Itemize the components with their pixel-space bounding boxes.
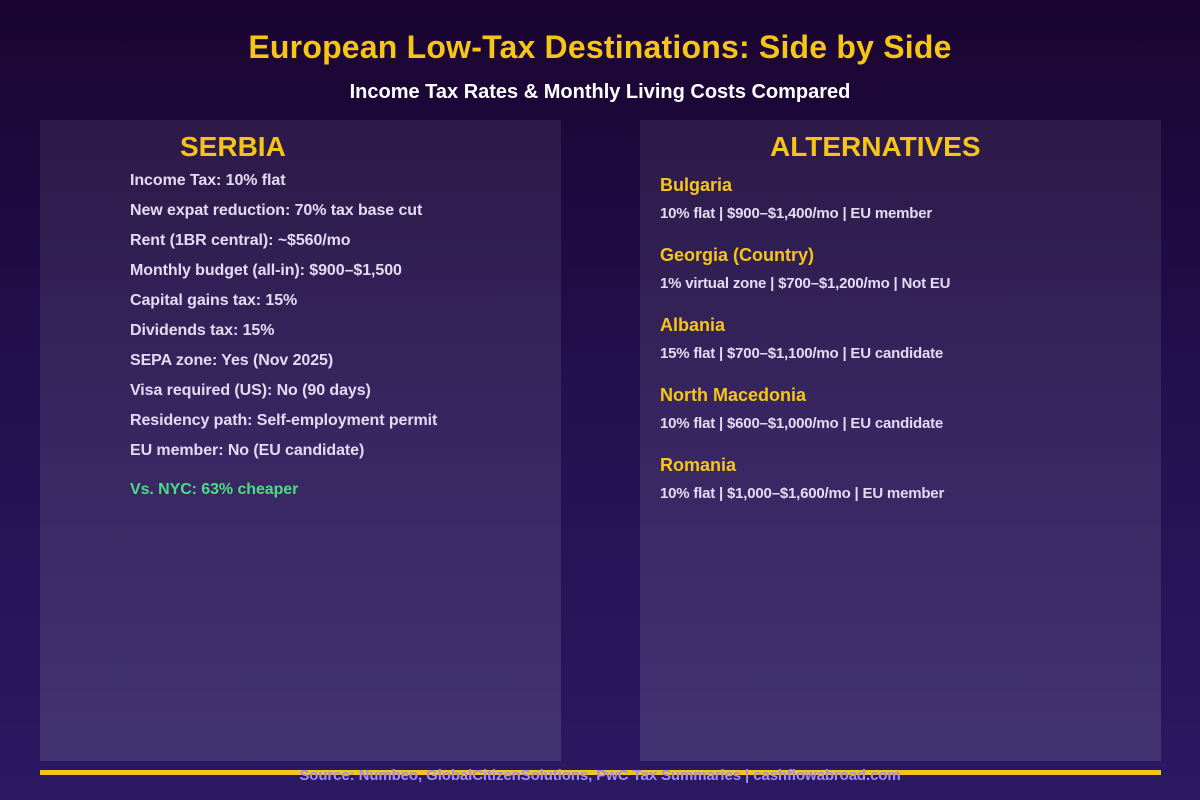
list: serbia facts: EU member: No (EU candidate) [130,442,364,459]
item: georgia: Georgia (Country) [660,245,814,265]
list: serbia facts: New expat reduction: 70% tax base cut [130,202,422,219]
callout: vs nyc: Vs. NYC: 63% cheaper [130,481,298,498]
item: bulgaria: Bulgaria [660,175,732,195]
subtitle: Income Tax Rates & Monthly Living Costs Compared [350,81,850,103]
list: serbia facts: Monthly budget (all-in): $900–$1,500 [130,262,402,279]
list: serbia facts: Capital gains tax: 15% [130,292,297,309]
item: bulgaria: 10% flat | $900–$1,400/mo | EU member [660,205,932,222]
list: serbia facts: Income Tax: 10% flat [130,172,286,189]
list: serbia facts: Rent (1BR central): ~$560/mo [130,232,350,249]
item: albania: Albania [660,315,725,335]
item: romania: Romania [660,455,736,475]
item: north macedonia: 10% flat | $600–$1,000/mo | EU candidate [660,415,943,432]
item: albania: 15% flat | $700–$1,100/mo | EU candidate [660,345,943,362]
source: Source: Numbeo, GlobalCitizenSolutions, PwC Tax Summaries | cashflowabroad.com [299,767,901,784]
list: serbia facts: Visa required (US): No (90 days) [130,382,371,399]
item: georgia: 1% virtual zone | $700–$1,200/mo | Not EU [660,275,950,292]
heading: alternatives: ALTERNATIVES [770,131,981,162]
panel: serbia [40,120,561,761]
item: north macedonia: North Macedonia [660,385,806,405]
title: European Low-Tax Destinations: Side by Side [248,29,952,65]
item: romania: 10% flat | $1,000–$1,600/mo | EU member [660,485,944,502]
item: albania [660,315,943,362]
item: georgia [660,245,950,292]
item: north macedonia [660,385,943,432]
item: bulgaria [660,175,932,222]
panel: alternatives [640,120,1161,761]
heading: serbia: SERBIA [180,131,286,162]
list: serbia facts [130,172,438,459]
list: serbia facts: Residency path: Self-employment permit [130,412,437,429]
list: serbia facts: SEPA zone: Yes (Nov 2025) [130,352,333,369]
footer bar [40,770,1161,775]
list: serbia facts: Dividends tax: 15% [130,322,274,339]
item: romania [660,455,944,502]
